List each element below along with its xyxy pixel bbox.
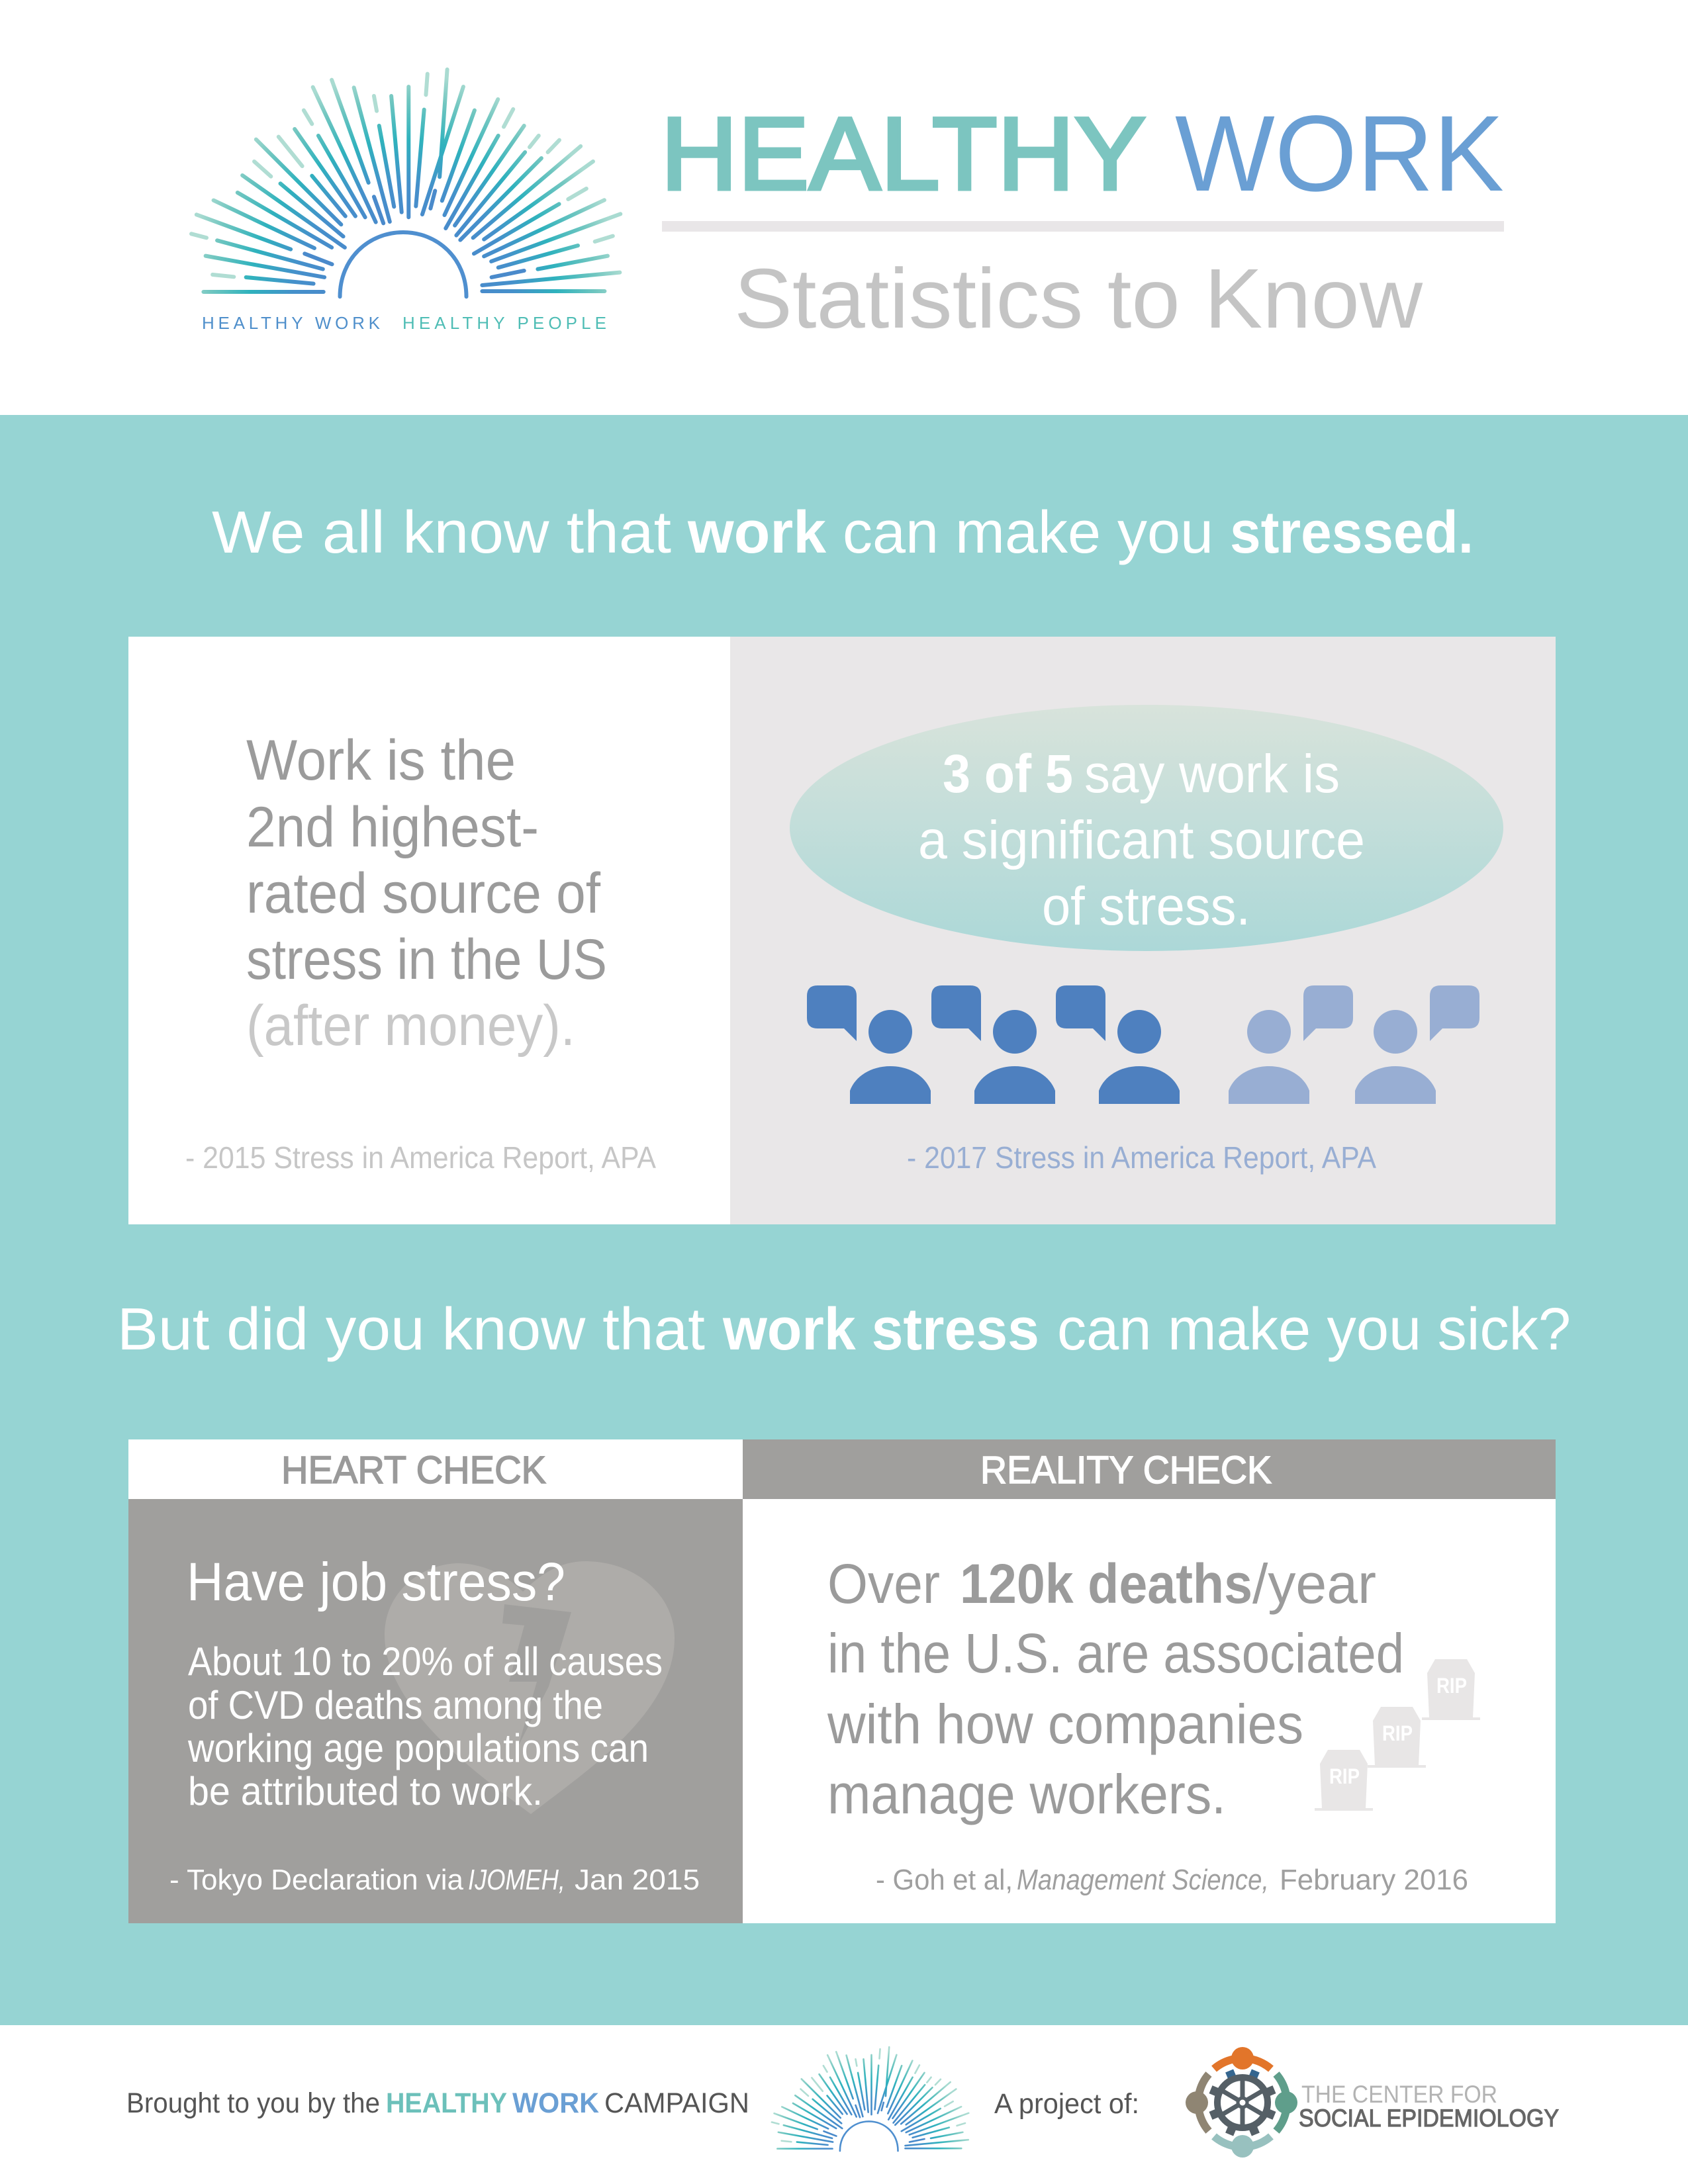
reality check statement: in the U.S. are associated <box>827 1622 1404 1684</box>
icon: people ring and gear <box>1186 2047 1297 2158</box>
source tokyo declaration: - Tokyo Declaration via <box>169 1864 464 1896</box>
icon: tombstone 1 <box>1422 1659 1480 1720</box>
title <box>661 93 1504 214</box>
icon: tombstone 2: RIP <box>1382 1721 1413 1745</box>
reality check statement: manage workers. <box>827 1763 1226 1825</box>
stat text: stress in the US <box>246 928 607 991</box>
title: HEALTHY <box>661 97 1146 212</box>
speech oval: a significant source <box>918 810 1365 870</box>
source tokyo declaration: IJOMEH, <box>468 1864 565 1896</box>
source goh et al: February 2016 <box>1280 1864 1468 1896</box>
footer credit <box>126 2087 749 2119</box>
icon: broken heart <box>385 1561 675 1814</box>
heading: work can make you stressed: stressed. <box>1230 500 1474 566</box>
reality check statement <box>827 1553 1404 1825</box>
source goh et al: - Goh et al, <box>876 1864 1013 1896</box>
source tokyo declaration <box>169 1864 700 1896</box>
subtitle: Statistics to Know <box>734 251 1423 346</box>
logo: center for social epidemiology <box>1186 2047 1559 2158</box>
heart check body text: working age populations can <box>187 1726 649 1770</box>
source goh et al: Management Science, <box>1017 1864 1269 1896</box>
icon: person speaking 5 <box>1355 985 1479 1104</box>
icon: sunburst rays <box>191 69 620 296</box>
heart check header: HEART CHECK <box>281 1449 546 1492</box>
heading: work stress can make you sick: can make you sick? <box>1057 1297 1571 1363</box>
heart check body text: About 10 to 20% of all causes <box>188 1639 663 1684</box>
stat text: (after money). <box>246 994 575 1058</box>
heading: work stress can make you sick <box>117 1297 1571 1363</box>
speech oval: 3 of 5 <box>943 744 1073 804</box>
reality check statement: 120k deaths <box>960 1553 1252 1615</box>
heart check body text: of CVD deaths among the <box>188 1683 603 1727</box>
icon: person speaking 2 <box>931 985 1055 1104</box>
project of label: A project of: <box>994 2088 1139 2120</box>
stat text: rated source of <box>246 862 601 925</box>
panel: 2nd highest source of stress <box>128 637 730 1224</box>
stat text <box>246 729 607 1058</box>
heart check body text <box>187 1639 663 1813</box>
heading: work stress can make you sick: work stress <box>722 1297 1039 1363</box>
footer credit: HEALTHY <box>386 2087 507 2119</box>
stat text: Work is the <box>246 729 516 792</box>
icon: person speaking 1 <box>807 985 931 1104</box>
logo tagline: HEALTHY PEOPLE <box>402 313 606 333</box>
heart check question: Have job stress? <box>187 1552 565 1612</box>
footer sunburst logo <box>772 2047 968 2151</box>
reality check statement: /year <box>1252 1553 1376 1615</box>
reality check statement: Over <box>827 1553 940 1615</box>
panel: 3 of 5 say work is a source of stress <box>730 637 1556 1224</box>
icon: person speaking 3 <box>1056 985 1180 1104</box>
panel: heart check <box>128 1439 743 1923</box>
center name: THE CENTER FOR <box>1301 2081 1497 2108</box>
reality check statement: with how companies <box>827 1693 1303 1755</box>
icon: tombstone 3 <box>1315 1750 1373 1811</box>
logo tagline <box>202 313 606 333</box>
source goh et al <box>876 1864 1468 1896</box>
title: WORK <box>1175 93 1504 214</box>
footer credit: Brought to you by the <box>126 2087 380 2119</box>
icon: tombstone 3: RIP <box>1329 1764 1360 1788</box>
heading: work can make you stressed <box>212 500 1474 566</box>
stat text: 2nd highest- <box>246 796 539 859</box>
source 2015: - 2015 Stress in America Report, APA <box>185 1140 656 1175</box>
icon: tombstone 2 <box>1368 1707 1426 1768</box>
logo: center for social epidemiology: SOCIAL EPIDEMIOLOGY <box>1299 2105 1559 2132</box>
source 2017: - 2017 Stress in America Report, APA <box>907 1140 1376 1175</box>
heading: work can make you stressed: We all know that <box>212 500 671 566</box>
teal background band <box>0 415 1688 2025</box>
logo: healthy work sunburst <box>191 69 620 333</box>
heading: work can make you stressed: can make you <box>843 500 1213 566</box>
heart check body text: be attributed to work. <box>188 1769 543 1813</box>
heading: work can make you stressed: work <box>687 500 827 566</box>
speech oval: say work is <box>1084 744 1340 804</box>
panel: reality check <box>743 1439 1556 1923</box>
icon: person speaking 4 <box>1229 985 1353 1104</box>
footer credit: CAMPAIGN <box>604 2087 749 2119</box>
icon: tombstone 1: RIP <box>1436 1674 1467 1698</box>
footer credit: WORK <box>512 2087 599 2119</box>
logo tagline: HEALTHY WORK <box>202 313 381 333</box>
heading: work stress can make you sick: But did you know that <box>117 1297 705 1363</box>
speech oval: of stress. <box>1042 876 1250 936</box>
speech oval <box>790 705 1503 951</box>
reality check header: REALITY CHECK <box>980 1449 1272 1492</box>
source tokyo declaration: Jan 2015 <box>575 1864 700 1896</box>
